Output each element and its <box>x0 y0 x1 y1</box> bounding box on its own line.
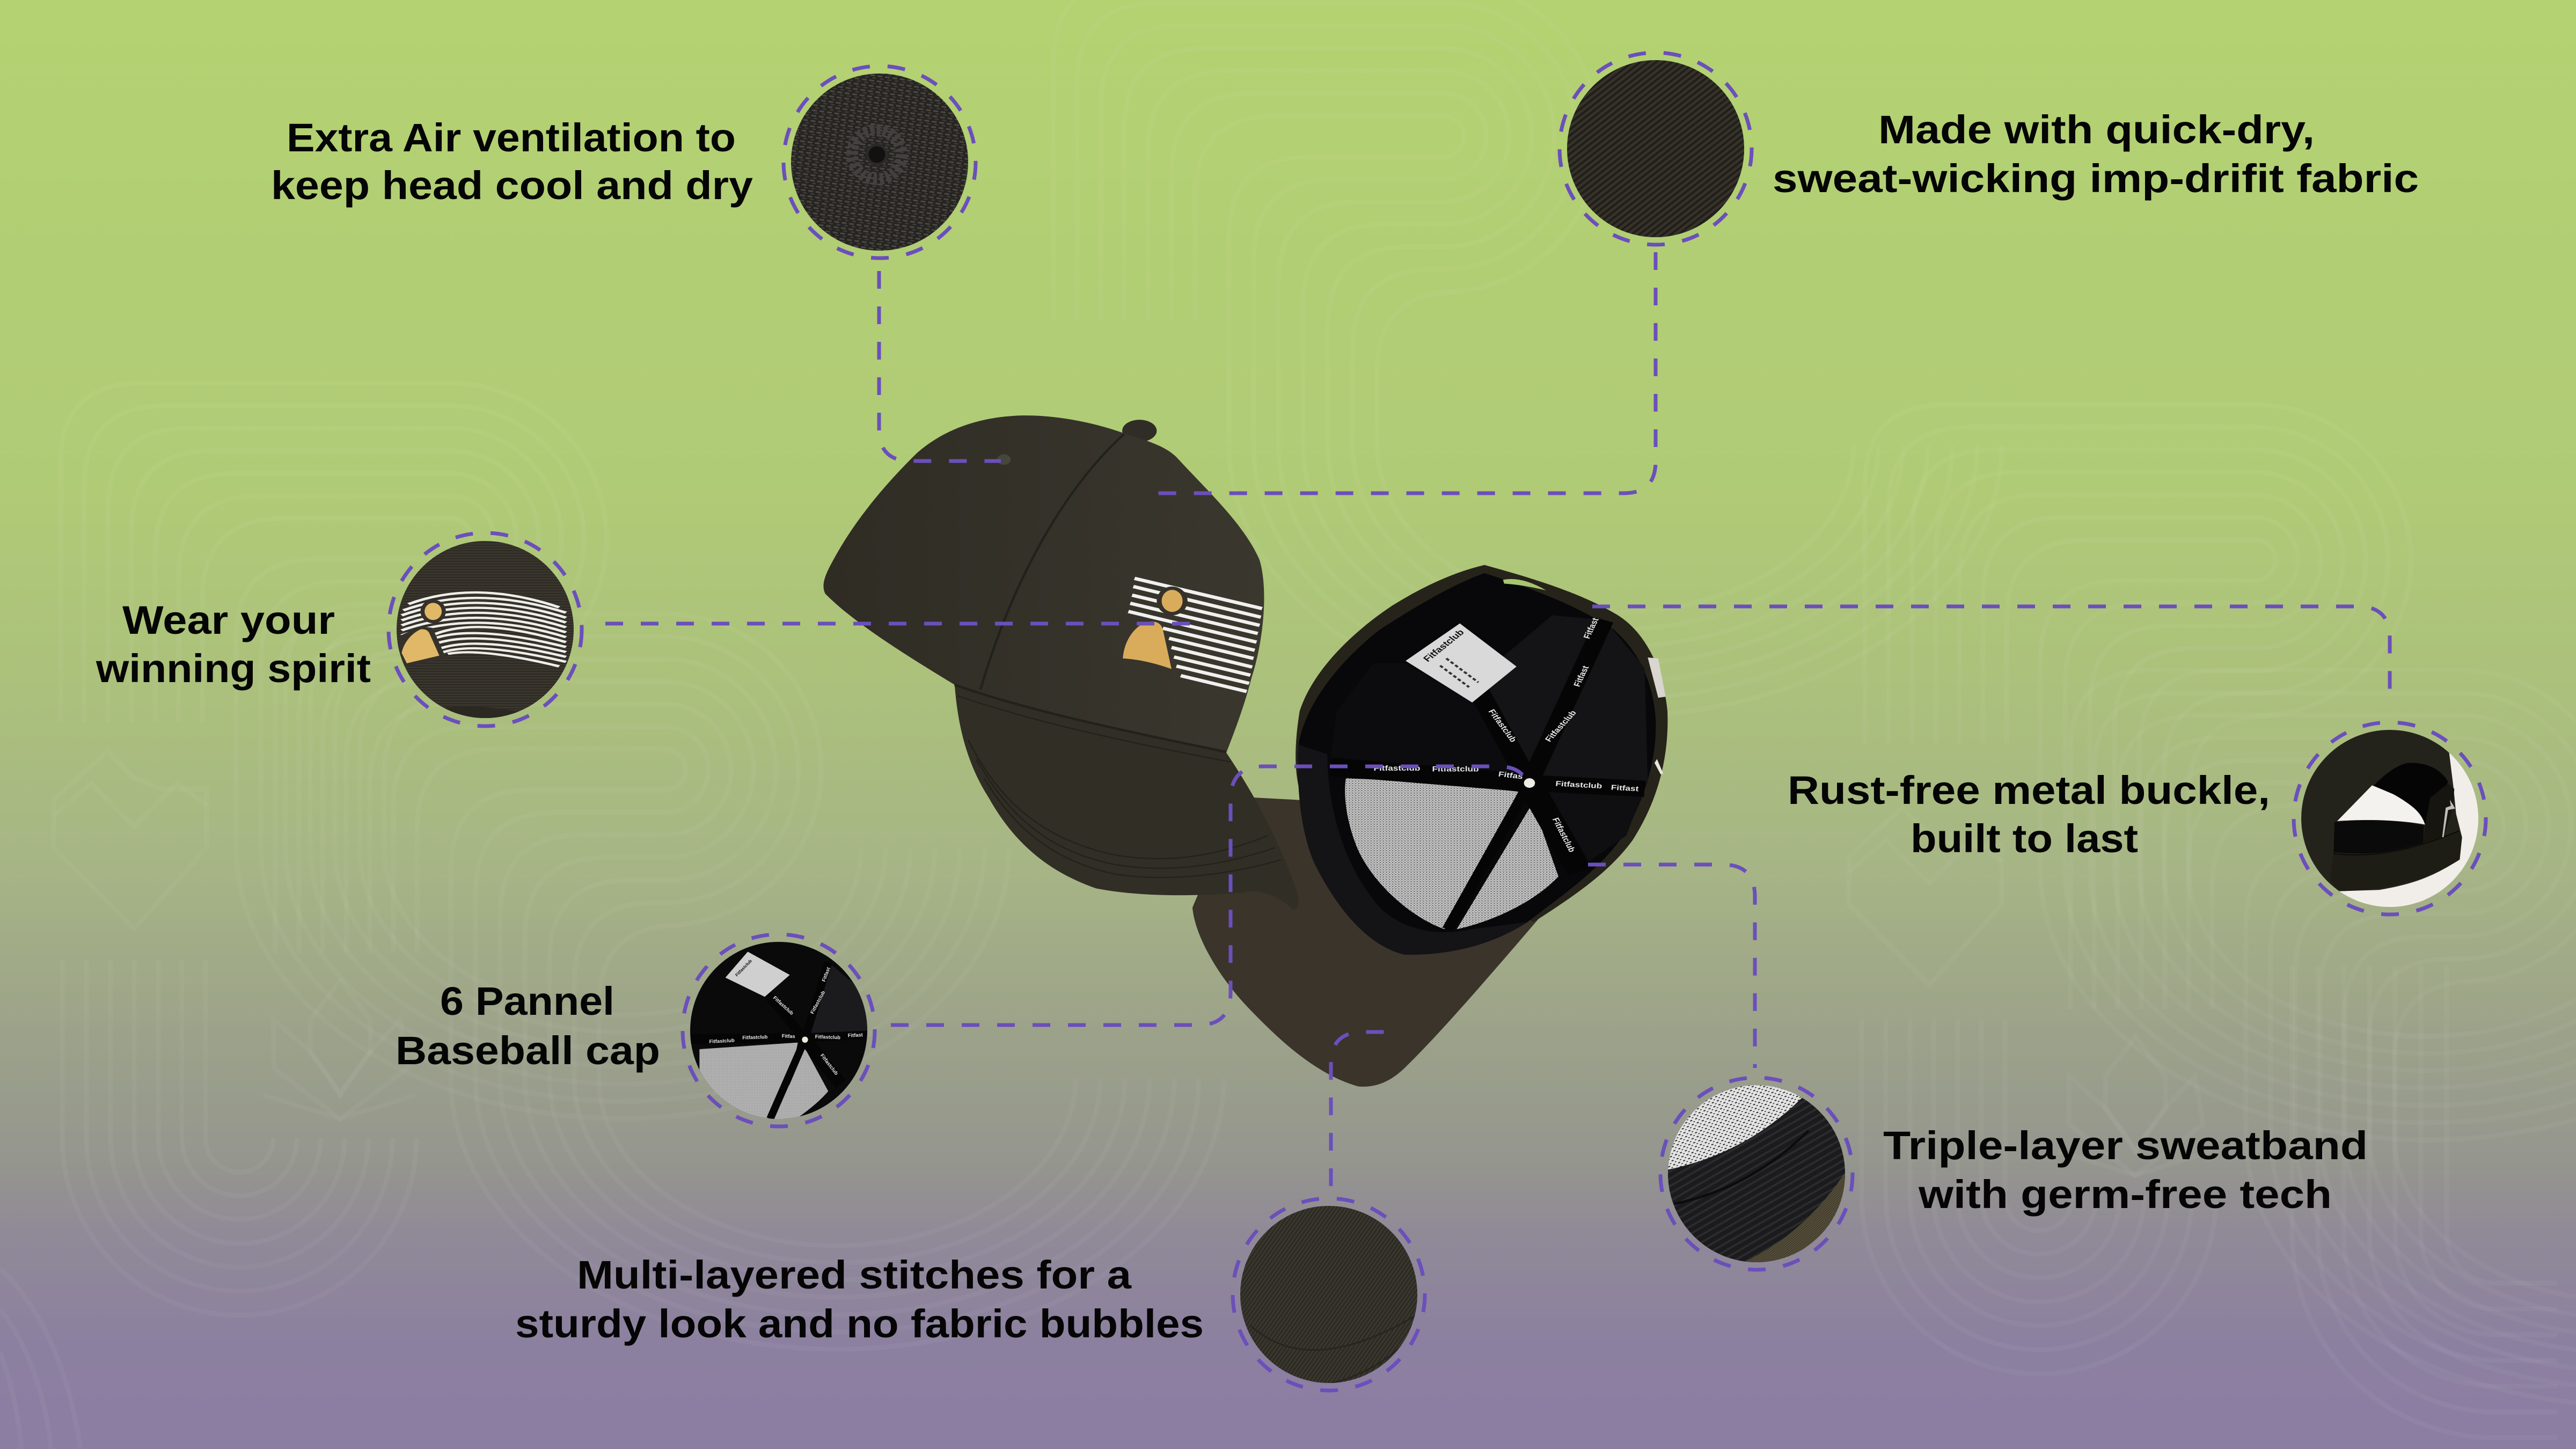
detail circle: six-panel interior: Fitfastclub <box>742 1034 768 1041</box>
sweatband <box>1298 745 1527 955</box>
connector: metal buckle <box>1592 606 2390 701</box>
ribbon branding: Fitfastclub <box>1373 765 1420 772</box>
text: sweatband: Triple-layer sweatband <box>1883 1123 2368 1168</box>
connector: sweatband <box>1588 865 1755 1068</box>
text: winning spirit: Wear your <box>122 598 335 642</box>
vent eyelet <box>997 454 1011 465</box>
ribbon branding: Fitfast <box>1582 617 1601 640</box>
product photo: underside of the cap <box>1192 565 1668 1087</box>
text: six panels: 6 Pannel <box>440 979 614 1023</box>
text: metal buckle: Rust-free metal buckle, <box>1788 768 2270 813</box>
text: stitches <box>515 1253 1204 1346</box>
ribbon branding: Fitfast <box>1572 665 1591 688</box>
detail circle: ventilation eyelet <box>781 64 978 260</box>
detail circle: six-panel interior: Fitfastclub <box>815 1034 840 1040</box>
top button <box>1122 420 1157 442</box>
text: metal buckle: built to last <box>1911 816 2138 861</box>
product photo: front of the cap <box>823 415 1299 910</box>
text: sweatband: with germ-free tech <box>1918 1172 2332 1217</box>
brim <box>955 685 1299 910</box>
detail circle: buckle close-up <box>2292 721 2488 917</box>
centre button <box>1524 778 1535 788</box>
text: winning spirit: winning spirit <box>96 646 371 691</box>
ribbon branding: Fitfastclub <box>1555 780 1602 791</box>
ribbon branding: Fitfas <box>1498 770 1524 781</box>
ribbon branding <box>1373 617 1639 853</box>
detail circle: six-panel interior: Fitfastclub <box>819 1053 839 1076</box>
detail circle: triple-layer sweatband <box>1658 1076 1855 1272</box>
ribbon branding: Fitfastclub <box>1550 817 1577 853</box>
detail circle: six-panel interior: Fitfas <box>782 1033 795 1039</box>
detail circle: six-panel interior: Fitfastclub <box>734 958 753 977</box>
connector: air ventilation <box>879 271 1001 461</box>
text: quick-dry fabric: sweat-wicking imp-drifit fabric <box>1773 156 2419 201</box>
text: air ventilation <box>271 115 753 208</box>
connector: stitches <box>1331 1032 1386 1186</box>
care label: Fitfastclub <box>1421 627 1466 663</box>
detail circle: six-panel interior <box>680 933 877 1128</box>
detail circle: six-panel interior: Fitfast <box>848 1032 863 1038</box>
text: six panels <box>396 979 660 1073</box>
detail circle: six-panel interior: Fitfastclub <box>772 995 795 1016</box>
mesh panels <box>1345 778 1518 929</box>
text: stitches: Multi-layered stitches for a <box>577 1253 1132 1297</box>
cap interior <box>1298 573 1656 955</box>
connector: six panels <box>891 766 1527 1025</box>
detail circle: logo close-up <box>386 531 584 728</box>
care label <box>1406 624 1517 702</box>
text: quick-dry fabric <box>1773 107 2419 201</box>
back strap opening and buckle <box>1503 579 1666 774</box>
ribbon branding: Fitfastclub <box>1432 765 1479 773</box>
cap underside brim <box>1192 797 1540 1087</box>
connector: winning spirit logo <box>605 621 1196 626</box>
text: stitches: sturdy look and no fabric bubbles <box>515 1301 1204 1346</box>
text: quick-dry fabric: Made with quick-dry, <box>1878 107 2315 152</box>
text: metal buckle <box>1788 768 2270 861</box>
ribbon branding: Fitfastclub <box>1486 708 1518 743</box>
detail circle: six-panel interior: Fitfastclub <box>709 1038 735 1044</box>
cap logo <box>1123 579 1262 691</box>
detail circle: six-panel interior: Fitfast <box>821 967 831 983</box>
ribbons <box>1330 620 1645 929</box>
cap outer crown edge <box>1296 565 1667 922</box>
connector: quick-dry fabric <box>1157 252 1656 493</box>
text: winning spirit <box>96 598 371 691</box>
detail circle: six-panel interior: Fitfastclub <box>809 990 826 1015</box>
text: sweatband <box>1883 1123 2368 1217</box>
text: air ventilation: Extra Air ventilation to <box>287 115 736 160</box>
crown <box>823 415 1264 754</box>
detail circle: quick-dry fabric <box>1557 51 1754 247</box>
text: six panels: Baseball cap <box>396 1028 660 1073</box>
ribbon branding: Fitfast <box>1611 784 1639 793</box>
detail circle: multi-layered stitches <box>1231 1197 1426 1392</box>
text: air ventilation: keep head cool and dry <box>271 163 753 208</box>
ribbon branding: Fitfastclub <box>1543 709 1578 743</box>
